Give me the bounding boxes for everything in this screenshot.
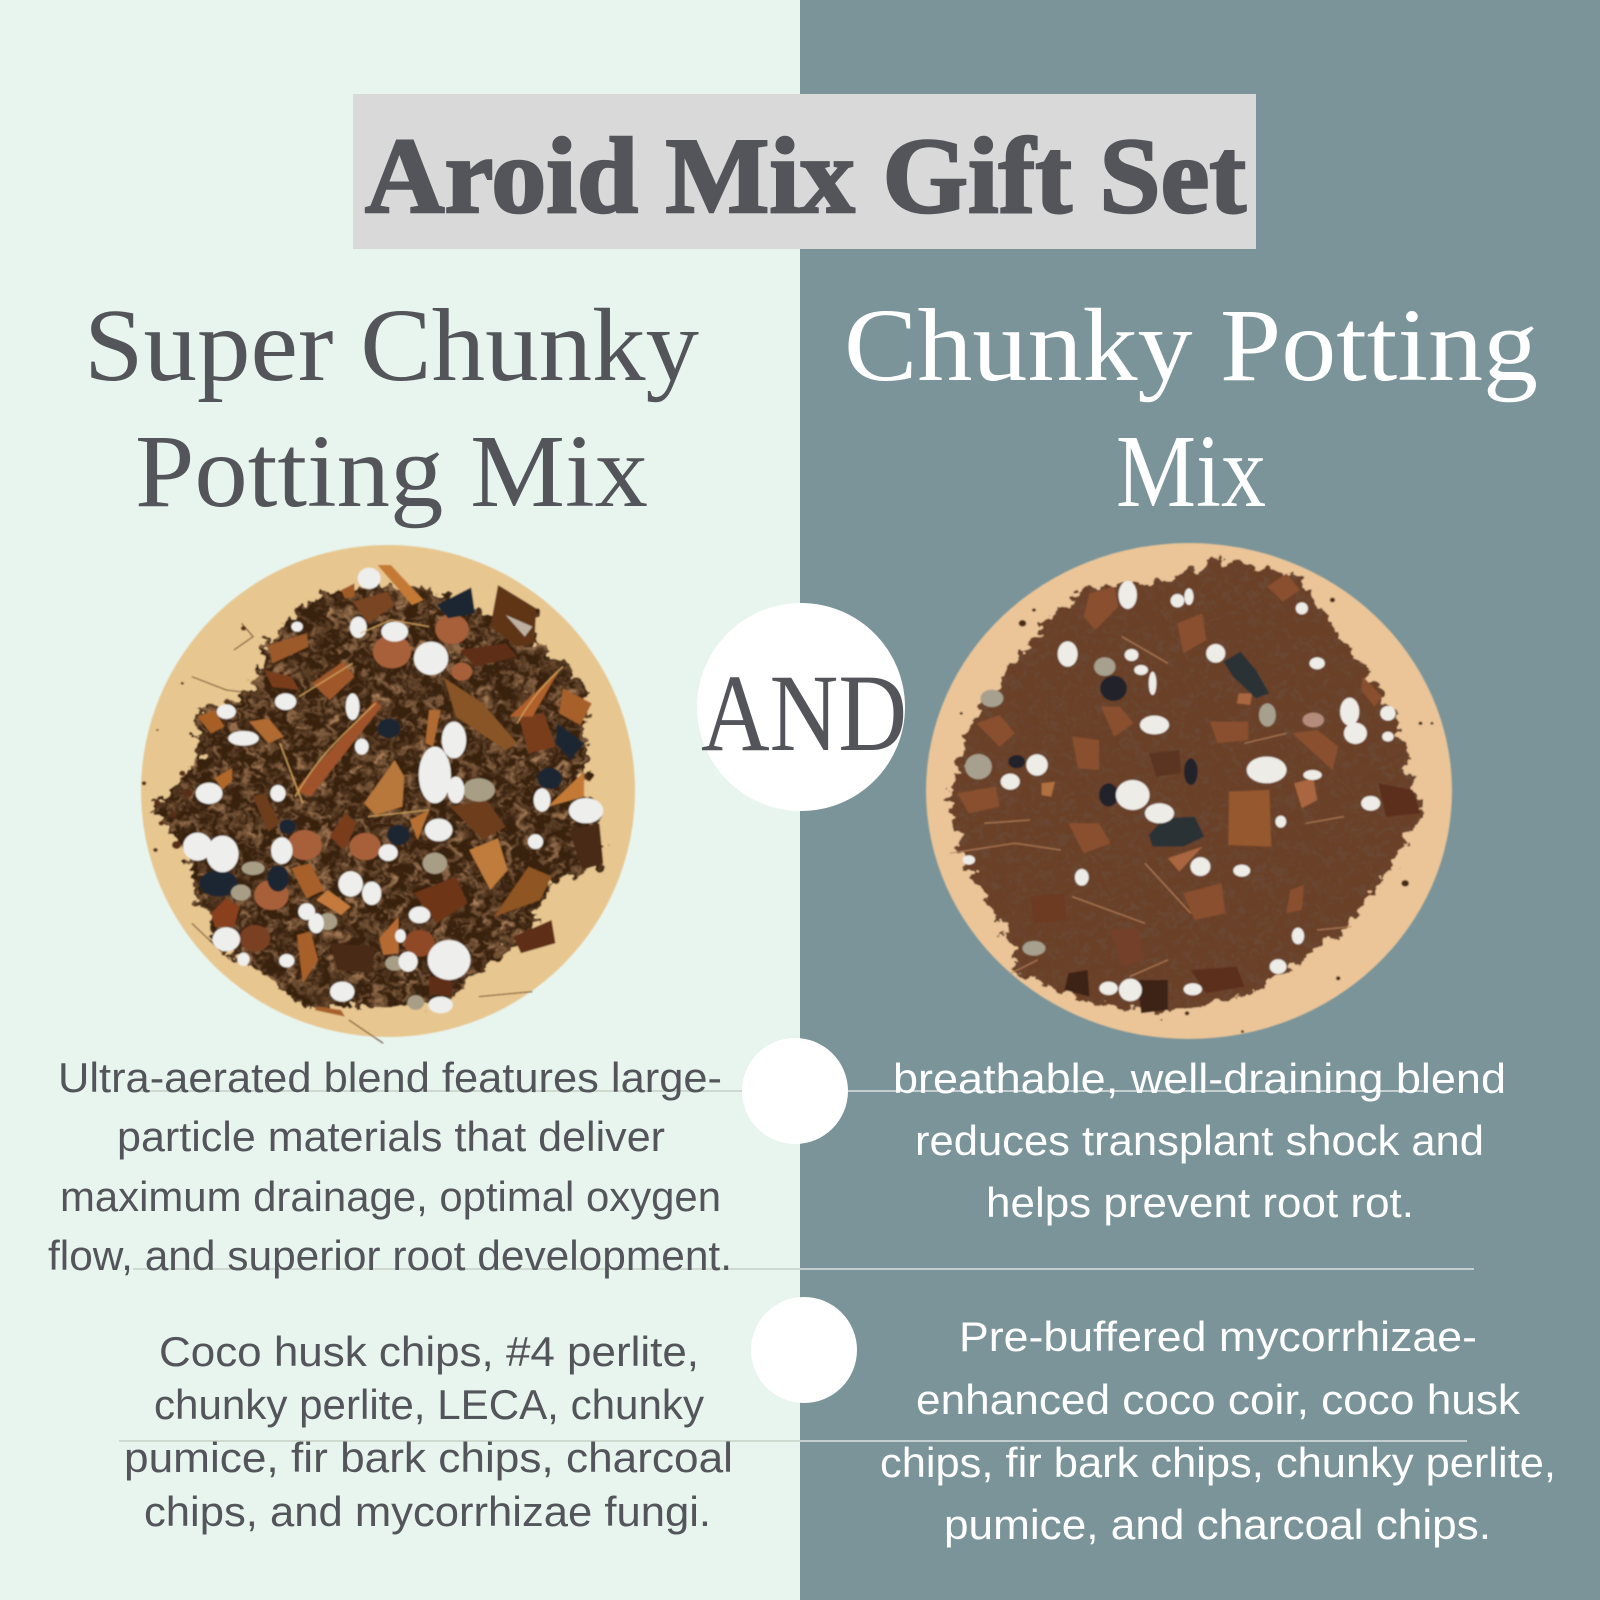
text block: super chunky description: maximum drainage, optimal oxygen xyxy=(60,1173,721,1220)
heading: Chunky Potting Mix: Mix xyxy=(1116,414,1266,529)
text block: chunky ingredients: enhanced coco coir, coco husk xyxy=(916,1376,1521,1423)
photo: chunky mix on wooden plate xyxy=(926,543,1452,1039)
connector circle: AND: AND xyxy=(701,652,907,774)
text block: chunky description: reduces transplant shock and xyxy=(915,1117,1484,1164)
panel: right background xyxy=(800,0,1600,1600)
heading: Super Chunky Potting Mix: Super Chunky xyxy=(84,288,699,403)
text block: super chunky ingredients: chips, and mycorrhizae fungi. xyxy=(144,1488,711,1535)
text block: super chunky ingredients: pumice, fir bark chips, charcoal xyxy=(124,1434,733,1481)
text block: chunky ingredients: chips, fir bark chips, chunky perlite, xyxy=(880,1439,1556,1486)
text block: chunky ingredients xyxy=(880,1313,1556,1548)
photo: super chunky mix on wooden plate xyxy=(138,545,635,1043)
text block: chunky description: breathable, well-draining blend xyxy=(893,1055,1506,1102)
heading: Chunky Potting Mix: Chunky Potting xyxy=(844,288,1538,403)
text block: chunky ingredients: Pre-buffered mycorrhizae- xyxy=(959,1313,1477,1360)
text block: super chunky ingredients: chunky perlite, LECA, chunky xyxy=(154,1381,704,1428)
circle: ingredients row marker xyxy=(751,1297,857,1403)
title banner: Aroid Mix Gift Set xyxy=(365,117,1246,236)
text block: super chunky ingredients: Coco husk chips, #4 perlite, xyxy=(159,1328,699,1375)
text block: super chunky description xyxy=(48,1054,732,1279)
text block: chunky ingredients: pumice, and charcoal chips. xyxy=(944,1501,1491,1548)
panel: left background xyxy=(0,0,800,1600)
connector circle: AND xyxy=(697,603,907,811)
text block: super chunky description: flow, and superior root development. xyxy=(48,1232,732,1279)
text block: chunky description: helps prevent root rot. xyxy=(986,1179,1414,1226)
heading: Chunky Potting Mix xyxy=(844,288,1538,529)
circle: description row marker xyxy=(742,1038,848,1144)
text block: super chunky ingredients xyxy=(124,1328,733,1535)
text block: super chunky description: Ultra-aerated blend features large- xyxy=(58,1054,722,1101)
text block: super chunky description: particle materials that deliver xyxy=(117,1113,665,1160)
text block: chunky description xyxy=(893,1055,1506,1226)
heading: Super Chunky Potting Mix: Potting Mix xyxy=(135,414,648,529)
heading: Super Chunky Potting Mix xyxy=(84,288,699,529)
